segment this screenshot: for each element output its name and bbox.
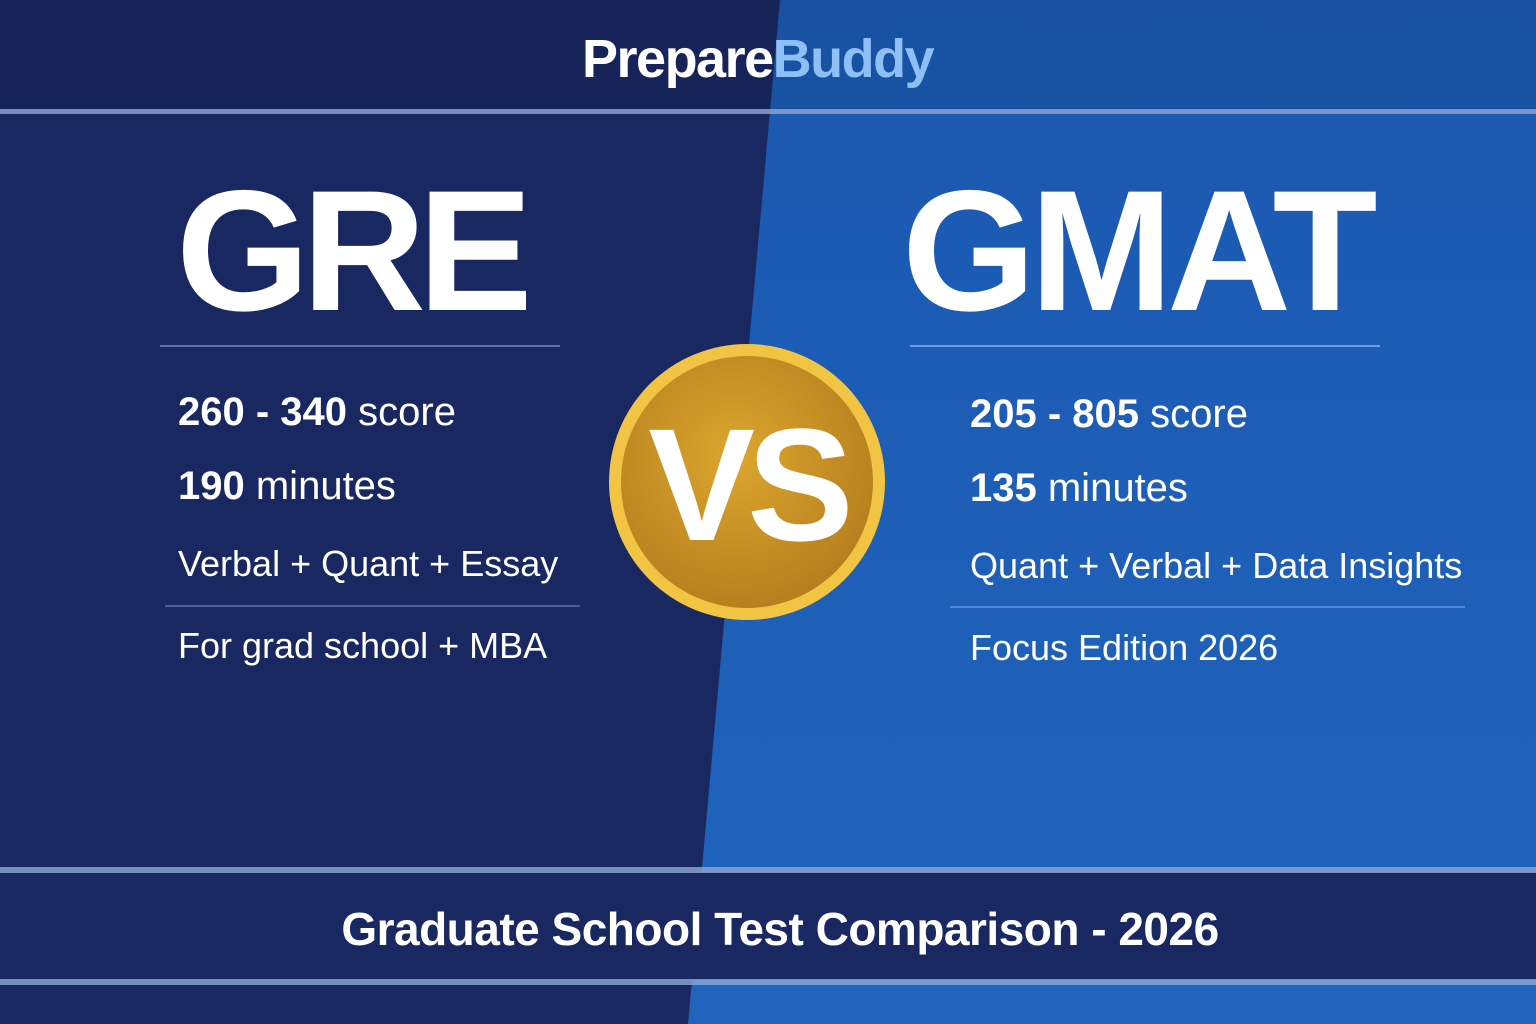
text: 205 - 805 score	[970, 392, 1248, 436]
heading: GMAT: GMAT	[902, 155, 1372, 347]
panel: GMAT facts	[970, 392, 1462, 668]
logo: PrepareBuddy	[582, 29, 933, 89]
text: For grad school + MBA	[178, 625, 547, 666]
text: 135 minutes	[970, 466, 1188, 510]
heading: GRE: GRE	[176, 155, 525, 347]
text: 190 minutes	[178, 464, 396, 508]
panel: GRE facts	[178, 390, 558, 666]
icon: VS coin: VS	[648, 395, 848, 574]
icon: VS coin	[609, 344, 885, 620]
text: Quant + Verbal + Data Insights	[970, 545, 1462, 586]
text: 260 - 340 score	[178, 390, 456, 434]
text: Focus Edition 2026	[970, 627, 1278, 668]
footer title: Graduate School Test Comparison - 2026	[341, 903, 1219, 955]
text: Verbal + Quant + Essay	[178, 543, 558, 584]
